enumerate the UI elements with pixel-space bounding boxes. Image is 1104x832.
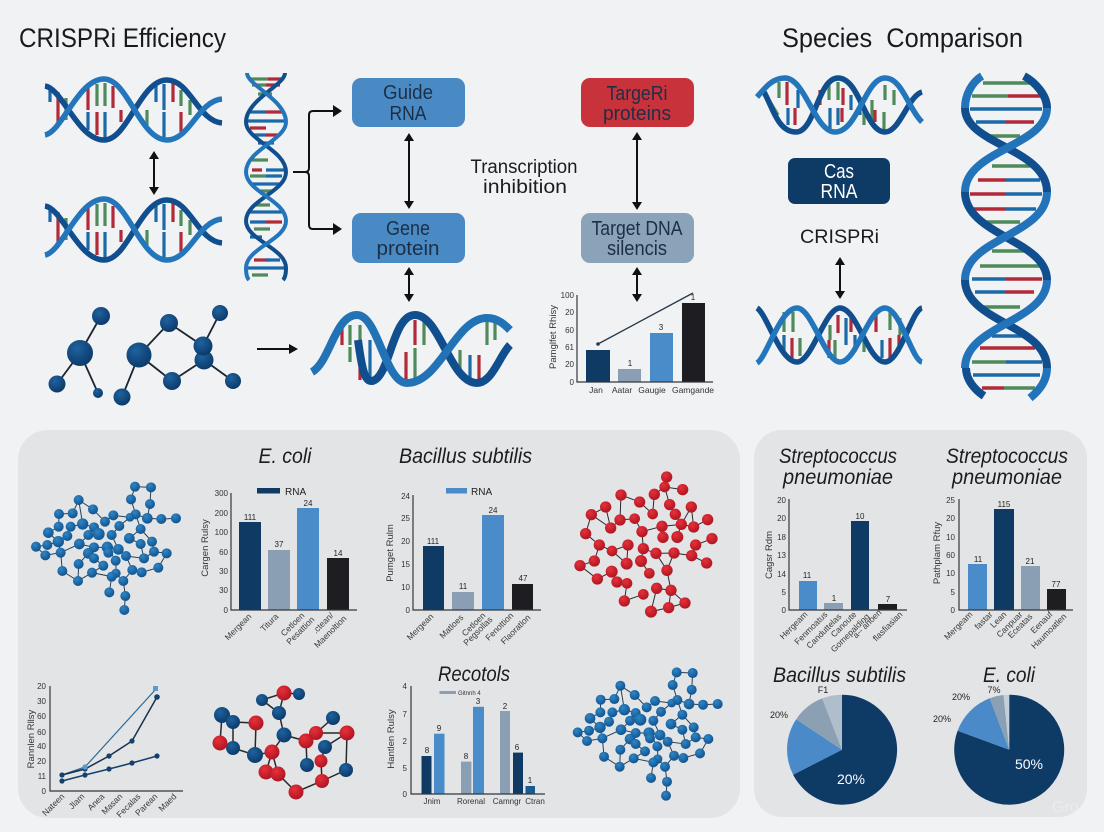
title: CRISPRi Efficiency: CRISPRi Efficiency — [19, 23, 226, 53]
DNA helix: top left — [45, 79, 222, 140]
chart: top bar and line chart: Jan — [589, 385, 603, 395]
arrow: Target DNA to chart — [632, 267, 642, 302]
chart: top bar and line chart: 1 — [691, 293, 696, 302]
chart: top bar and line chart: Aatar — [612, 385, 632, 395]
grouped bar chart: Recotols: 8 — [425, 746, 430, 755]
bar chart: Bacillus subtilis: 11 — [459, 582, 468, 591]
arrow: between top-left helices — [149, 151, 159, 195]
bar chart: E. coli: 14 — [334, 549, 343, 558]
bar chart: Streptococcus left: 20 — [777, 514, 787, 523]
molecule: small navy network — [48, 305, 241, 406]
grouped bar chart: Recotols: 7 — [403, 710, 408, 719]
bar chart: Streptococcus right: 60 — [946, 551, 956, 560]
line chart: 0 — [42, 787, 47, 796]
heading: Streptococcus pneumoniae left: pneumoniae — [782, 466, 893, 489]
chart: top bar and line chart: 0 — [570, 378, 575, 387]
line chart: Fecalas — [114, 791, 142, 819]
bar chart: Bacillus subtilis — [385, 487, 541, 647]
chart: top bar and line chart: 3 — [659, 323, 664, 332]
box: Gene protein — [352, 213, 465, 263]
line chart: 60 — [37, 728, 47, 737]
pie chart: E. coli: 7% — [987, 685, 1001, 695]
grouped bar chart: Recotols: Jnim — [424, 797, 441, 806]
bar chart: Bacillus subtilis: 47 — [519, 574, 528, 583]
bar chart: Streptococcus right: Haumoatlen — [1029, 611, 1069, 651]
molecule: mixed red and blue network — [212, 686, 354, 800]
label: Transcription inhibition — [470, 157, 578, 198]
box: Guide RNA: Guide — [383, 82, 433, 104]
bar chart: E. coli: 100 — [215, 528, 229, 537]
chart: top bar and line chart: 100 — [561, 291, 575, 300]
chart: top bar and line chart: 60 — [565, 326, 575, 335]
bar chart: Streptococcus left: 10 — [856, 512, 865, 521]
bar chart: E. coli — [200, 487, 357, 650]
DNA helix: vertical — [246, 73, 286, 280]
bar chart: Streptococcus right: 10 — [946, 569, 956, 578]
bar chart: E. coli: 37 — [275, 540, 284, 549]
molecule: red network — [574, 471, 718, 618]
bar chart: Bacillus subtilis: Pumget Rulm — [385, 524, 396, 582]
heading: Streptococcus pneumoniae right: pneumoniae — [951, 466, 1062, 489]
bar chart: E. coli: Pesattion — [284, 614, 317, 646]
arrow: Guide RNA to Gene protein — [404, 133, 414, 209]
chart: top bar and line chart: 61 — [565, 343, 575, 352]
pie chart: Bacillus subtilis: 20% — [837, 771, 865, 787]
heading: Streptococcus pneumoniae left — [779, 445, 897, 489]
chart: top bar and line chart: 1 — [628, 359, 633, 368]
bar chart: Streptococcus left: Gomepalding — [829, 611, 872, 654]
label: CRISPRi: CRISPRi — [800, 227, 879, 248]
DNA helix: large vertical right — [965, 76, 1047, 398]
bar chart: Bacillus subtilis: Flaoratlon — [499, 612, 533, 646]
panel: species efficiency — [18, 430, 740, 819]
title: Species Comparison: Species Comparison — [782, 23, 1023, 53]
arrow: CRISPRi to helix — [835, 257, 845, 299]
grouped bar chart: Recotols: Rorenal — [457, 797, 485, 806]
grouped bar chart: Recotols: 2 — [503, 702, 508, 711]
bar chart: Bacillus subtilis: Mergean — [405, 611, 436, 642]
bar chart: Bacillus subtilis: 24 — [401, 492, 411, 501]
chart: top bar and line chart: Gamgande — [672, 385, 714, 395]
grouped bar chart: Recotols: Gitnnh 4 — [458, 691, 481, 697]
box: Guide RNA — [352, 78, 465, 127]
bar chart: Streptococcus left: 18 — [777, 533, 787, 542]
pie chart: E. coli: 20% — [952, 692, 970, 702]
bar chart: Streptococcus right: 77 — [1052, 580, 1061, 589]
grouped bar chart: Recotols: Camngr — [493, 797, 522, 806]
bar chart: E. coli: 30 — [219, 586, 229, 595]
box: TargeRi proteins — [581, 78, 694, 127]
bar chart: Bacillus subtilis: 111 — [427, 537, 440, 546]
bar chart: E. coli: 24 — [304, 499, 313, 508]
grouped bar chart: Recotols: 1 — [528, 776, 533, 785]
bar chart: Streptococcus left: 11 — [803, 571, 812, 580]
line chart: Jlam — [67, 791, 86, 811]
heading: E. coli: E. coli — [258, 445, 313, 468]
pie chart: E. coli: 50% — [1015, 756, 1043, 772]
line chart: 40 — [37, 742, 47, 751]
box: Cas RNA — [788, 158, 890, 204]
grouped bar chart: Recotols: 6 — [515, 743, 520, 752]
box: Target DNA silencis: silencis — [607, 238, 667, 260]
heading: E. coli pie: E. coli — [983, 664, 1036, 687]
bar chart: Streptococcus left: Canduttelas — [804, 611, 843, 650]
bar chart: E. coli: Cetloen — [279, 610, 307, 638]
bar chart: E. coli: Titura — [258, 611, 281, 634]
molecule: blue network upper left — [31, 482, 181, 615]
label: Transcription inhibition: inhibition — [483, 177, 567, 198]
box: Gene protein: Gene — [386, 218, 430, 240]
bar chart: E. coli: .ctean/ — [310, 610, 336, 635]
line chart: Parean — [133, 791, 160, 818]
bar chart: Streptococcus right: Lean — [988, 609, 1009, 630]
grouped bar chart: Recotols: 4 — [403, 682, 408, 691]
bar chart: Streptococcus left: Canoute — [829, 609, 859, 639]
bar chart: Streptococcus right: Eenauf — [1028, 609, 1055, 635]
bar chart: E. coli: 300 — [215, 489, 229, 498]
bar chart: Streptococcus right: 21 — [1026, 557, 1035, 566]
line chart: Anea — [85, 791, 107, 812]
bar chart: Streptococcus left — [764, 496, 907, 654]
line chart: Maed — [156, 791, 179, 813]
heading: Streptococcus pneumoniae right: Streptococcus — [946, 445, 1068, 468]
heading: Recotols: Recotols — [438, 663, 510, 686]
line chart: Nateen — [40, 791, 67, 818]
heading: Bacillus subtilis: Bacillus subtilis — [399, 445, 532, 468]
bar chart: Streptococcus left: 14 — [777, 570, 787, 579]
bar chart: Streptococcus left: 5 — [782, 588, 787, 597]
bar chart: Streptococcus right: 25 — [946, 496, 956, 505]
grouped bar chart: Recotols: 9 — [437, 724, 442, 733]
grouped bar chart: Recotols: Ctran — [525, 797, 545, 806]
grouped bar chart: Recotols: Hantlen Rulsy — [386, 709, 397, 769]
chart: top bar and line chart: 20 — [565, 308, 575, 317]
bar chart: Bacillus subtilis: RNA — [471, 487, 492, 498]
bar chart: Bacillus subtilis: 0 — [406, 606, 411, 615]
bar chart: E. coli: 60 — [219, 548, 229, 557]
bar chart: E. coli: RNA — [285, 487, 306, 498]
bar chart: Bacillus subtilis: 10 — [401, 583, 411, 592]
line chart: 60 — [37, 712, 47, 721]
bar chart: Streptococcus left: 7 — [886, 595, 891, 604]
panel: species comparison — [754, 430, 1087, 817]
line chart — [26, 682, 183, 819]
bar chart: Streptococcus right: 115 — [998, 500, 1011, 509]
box: TargeRi proteins: TargeRi — [606, 83, 668, 105]
grouped bar chart: Recotols: 5 — [403, 764, 408, 773]
line chart: Masan — [99, 791, 125, 816]
bar chart: Streptococcus left: 13 — [777, 551, 787, 560]
box: Cas RNA: RNA — [820, 181, 858, 203]
bar chart: Streptococcus left: 1 — [832, 594, 837, 603]
bar chart: Streptococcus right: fastar — [972, 609, 995, 631]
box: Cas RNA: Cas — [824, 161, 854, 183]
bar chart: Streptococcus left: 0 — [782, 606, 787, 615]
bar chart: Streptococcus right — [932, 496, 1073, 651]
pie chart: Bacillus subtilis — [770, 685, 897, 805]
grouped bar chart: Recotols: 8 — [464, 752, 469, 761]
line chart: 20 — [37, 682, 47, 691]
DNA helix: second left — [45, 199, 222, 260]
DNA helix: lower right — [757, 308, 922, 363]
box: Target DNA silencis: Target DNA — [592, 218, 683, 240]
bar chart: Streptococcus left: Hergeam — [778, 609, 809, 641]
grouped bar chart: Recotols — [386, 682, 545, 806]
bar chart: Streptococcus left: a-- ahoen — [851, 607, 884, 640]
bar chart: E. coli: Maenoltion — [312, 613, 349, 650]
label: Transcription inhibition: Transcription — [470, 157, 578, 178]
line chart: 11 — [38, 772, 47, 781]
bar chart: Streptococcus right: 5 — [951, 588, 956, 597]
bar chart: Bacillus subtilis: Fenottion — [483, 610, 516, 642]
box: TargeRi proteins: proteins — [603, 103, 671, 125]
pie chart: Bacillus subtilis: F1 — [818, 685, 828, 695]
bar chart: Streptococcus left: flasfiasian — [871, 609, 905, 643]
bar chart: Streptococcus right: 20 — [946, 514, 956, 523]
bar chart: Streptococcus left: Cagsr Rdm — [764, 531, 775, 579]
chart: top bar and line chart — [548, 291, 714, 395]
DNA helix: top right — [757, 78, 922, 132]
bar chart: E. coli: 111 — [244, 513, 257, 522]
bar chart: Streptococcus left: Fenmoatus — [792, 609, 829, 646]
bar chart: Streptococcus right: 11 — [974, 555, 983, 564]
bar chart: Bacillus subtilis: 24 — [489, 506, 498, 515]
bar chart: Bacillus subtilis: Matloes — [437, 612, 465, 640]
bar chart: Bacillus subtilis: Cetloen — [460, 610, 488, 638]
bar chart: Streptococcus left: 20 — [777, 496, 787, 505]
bar chart: E. coli: 200 — [215, 509, 229, 518]
heading: Streptococcus pneumoniae left: Streptococcus — [779, 445, 897, 468]
bar chart: E. coli: Cargen Rulsy — [200, 519, 211, 577]
bracket arrow to Guide RNA and Gene protein — [293, 105, 342, 235]
bar chart: Streptococcus right: Canpuar — [994, 609, 1025, 639]
box: Gene protein: protein — [376, 238, 440, 260]
pie chart: E. coli — [933, 685, 1064, 805]
bar chart: Bacillus subtilis: 25 — [401, 514, 411, 523]
chart: top bar and line chart: Pamglfet Rhisy — [548, 305, 559, 369]
bar chart: Bacillus subtilis: 20 — [401, 537, 411, 546]
arrow: molecule to helix — [257, 344, 298, 354]
grouped bar chart: Recotols: 0 — [403, 790, 408, 799]
heading: Bacillus subtilis pie: Bacillus subtilis — [773, 664, 906, 687]
pie chart: Bacillus subtilis: 20% — [770, 710, 788, 720]
line chart: 20 — [37, 757, 47, 766]
bar chart: Bacillus subtilis: 15 — [401, 560, 411, 569]
bar chart: E. coli: 0 — [224, 606, 229, 615]
bar chart: Streptococcus right: 10 — [946, 533, 956, 542]
DNA helix: large centre — [312, 315, 510, 383]
line chart: Rannlen Rllsy — [26, 709, 37, 768]
bar chart: Streptococcus right: Mergeam — [942, 609, 974, 642]
molecule: blue network lower right — [573, 667, 723, 801]
bar chart: Streptococcus right: 0 — [951, 606, 956, 615]
grouped bar chart: Recotols: 2 — [403, 737, 408, 746]
bar chart: Bacillus subtilis: Pegsollas — [461, 614, 494, 647]
grouped bar chart: Recotols: 3 — [476, 697, 481, 706]
chart: top bar and line chart: 20 — [565, 360, 575, 369]
box: Target DNA silencis — [581, 213, 694, 263]
bar chart: E. coli: Mergean — [223, 611, 254, 642]
box: Guide RNA: RNA — [390, 103, 427, 125]
chart: top bar and line chart: Gaugie — [638, 385, 666, 395]
heading: Streptococcus pneumoniae right — [946, 445, 1068, 489]
bar chart: Streptococcus right: Eceatas — [1006, 611, 1034, 640]
watermark: Gro — [1052, 799, 1079, 816]
pie chart: E. coli: 20% — [933, 714, 951, 724]
arrow: TargeRi proteins to Target DNA — [632, 132, 642, 210]
line chart: 30 — [37, 697, 47, 706]
bar chart: E. coli: 30 — [219, 567, 229, 576]
arrow: Gene protein to helix — [404, 267, 414, 302]
bar chart: Streptococcus right: Pathplam Rfuy — [932, 522, 943, 584]
